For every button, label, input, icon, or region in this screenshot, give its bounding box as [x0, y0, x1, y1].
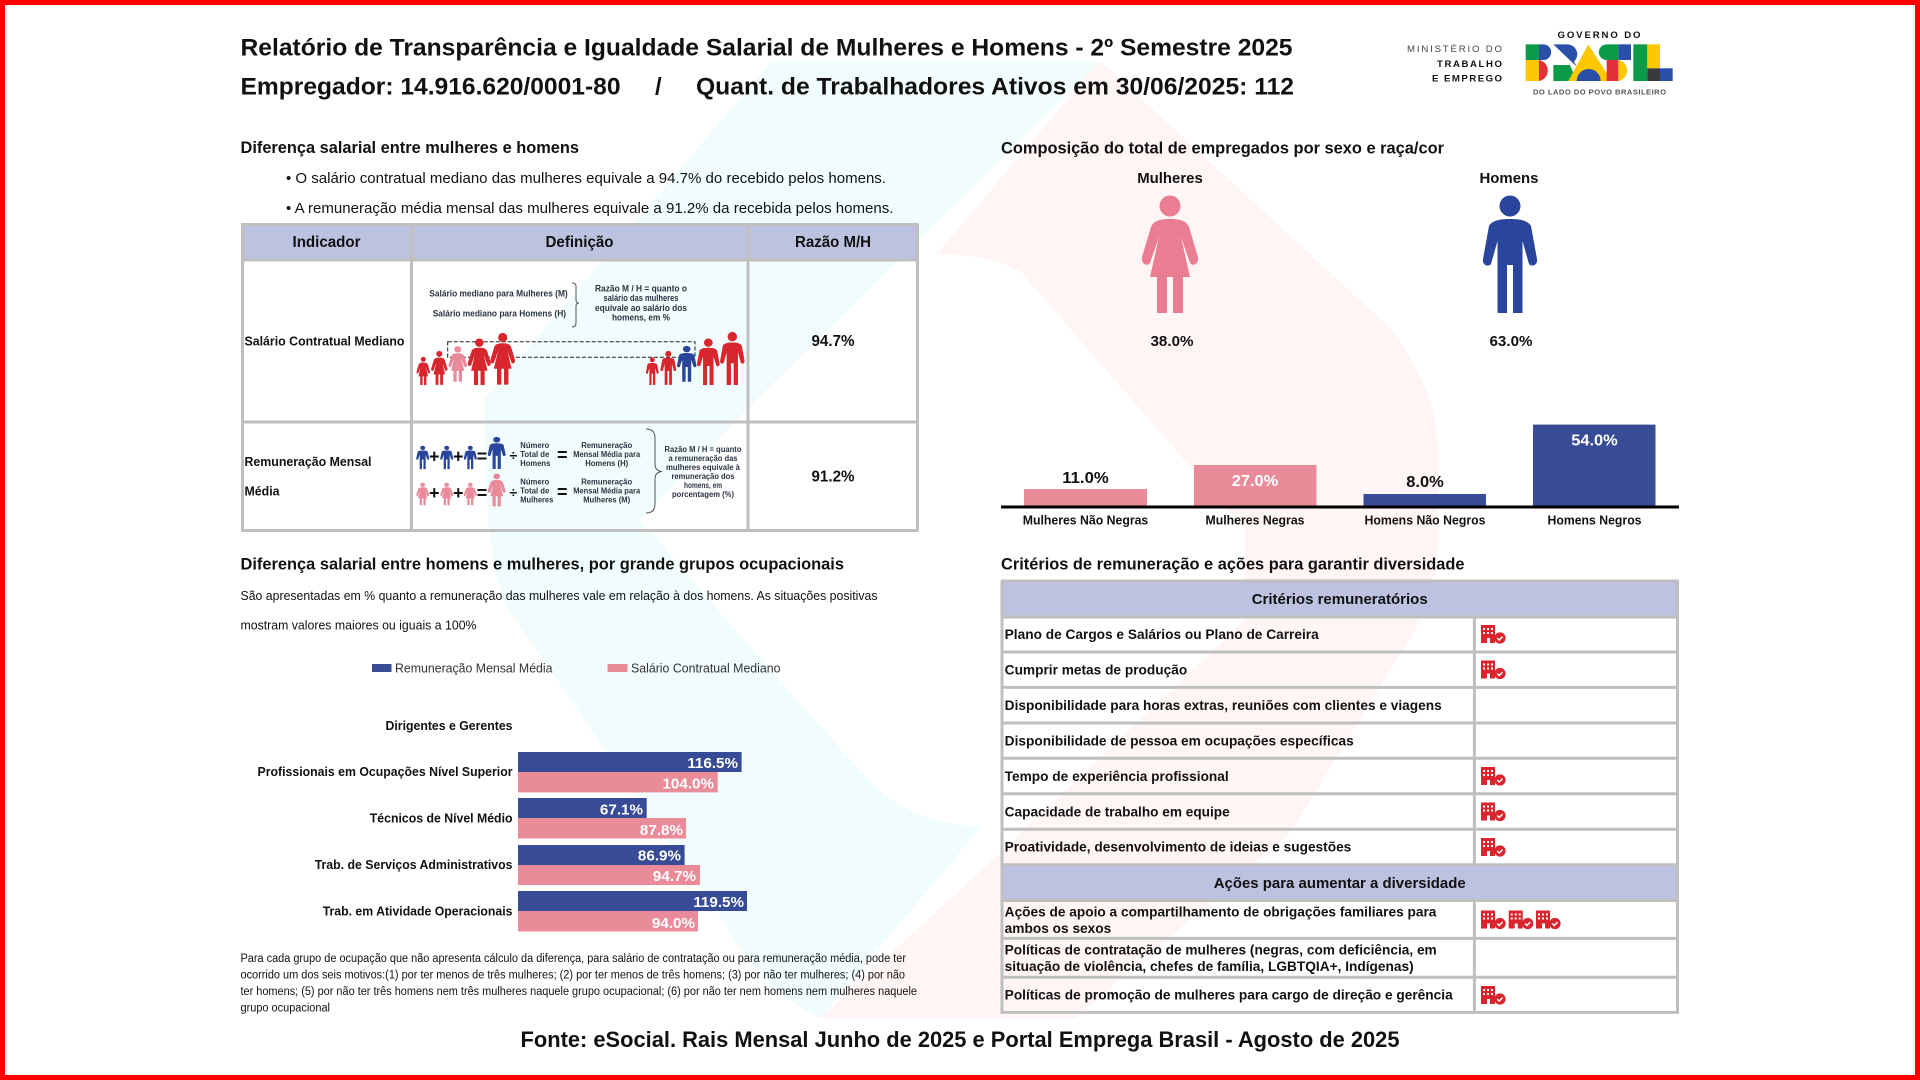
table: critérios e ações: Políticas de promoção de mulheres para cargo de direção e gerência [1005, 988, 1453, 1003]
table: indicadores: Razão M/H [795, 234, 871, 251]
table: critérios e ações: Proatividade, desenvolvimento de ideias e sugestões [1005, 840, 1351, 855]
bar chart: grupos: 119.5% [693, 894, 744, 911]
title: / [655, 74, 662, 100]
diagram: remuneração média [416, 429, 742, 513]
diagram: remuneração média: mulheres equivale à [666, 462, 740, 472]
pictogram: mulheres [1137, 171, 1203, 350]
panel: critérios [1001, 556, 1679, 1014]
diagram: salário mediano: Salário mediano para Mulheres (M) [429, 288, 568, 298]
diagram: remuneração média: Razão M / H = quanto [664, 444, 742, 454]
table: indicadores [241, 224, 918, 531]
pictogram: mulheres: Mulheres [1137, 171, 1203, 187]
diagram: salário mediano [417, 282, 745, 385]
table: critérios e ações: Tempo de experiência profissional [1005, 769, 1229, 784]
bar chart: sexo e raça: 11.0% [1062, 470, 1109, 487]
diagram: remuneração média: Remuneração [581, 440, 632, 450]
diagram: remuneração média: remuneração dos [672, 471, 735, 481]
bar chart: grupos: Dirigentes e Gerentes [386, 719, 512, 733]
diagram: remuneração média: Mulheres [520, 495, 553, 505]
diagram: remuneração média: a remuneração das [668, 453, 738, 463]
diagram: salário mediano: salário das mulheres [604, 292, 678, 303]
footnote: grupo ocupacional [240, 1003, 330, 1015]
bar chart: grupos: 104.0% [662, 776, 714, 793]
logo: Governo do Brasil: GOVERNO DO [1558, 30, 1641, 41]
logo: Ministério do Trabalho e Emprego: MINISTÉRIO DO [1407, 44, 1502, 55]
pictogram: homens [1480, 171, 1538, 350]
diagram: remuneração média: ÷ [509, 484, 517, 500]
title: Empregador: 14.916.620/0001-80 [240, 74, 620, 100]
logo: Governo do Brasil [1526, 30, 1673, 96]
pictogram: homens: 63.0% [1490, 334, 1532, 350]
legend: Remuneração Mensal Média [395, 660, 553, 676]
table: critérios e ações: Políticas de contratação de mulheres (negras, com deficiência, em [1005, 943, 1437, 958]
table: indicadores: 91.2% [812, 468, 855, 486]
diagram: remuneração média: Homens (H) [585, 458, 628, 468]
heading: diferença salarial: Diferença salarial entre mulheres e homens [240, 139, 579, 157]
bar chart: grupos: 87.8% [640, 822, 683, 839]
heading: grupos ocupacionais: Diferença salarial entre homens e mulheres, por grande grupos ocupacionais [240, 556, 844, 574]
table: critérios e ações: Cumprir metas de produção [1005, 662, 1187, 677]
diagram: remuneração média: + [429, 483, 440, 503]
bullet text: • O salário contratual mediano das mulheres equivale a 94.7% do recebido pelos homens. [286, 170, 886, 187]
bar chart: grupos: Profissionais em Ocupações Nível Superior [258, 765, 513, 779]
table: critérios e ações: Disponibilidade de pessoa em ocupações específicas [1005, 734, 1354, 749]
pictogram: homens: Homens [1480, 171, 1538, 187]
pictogram: mulheres: 38.0% [1150, 334, 1194, 350]
title [240, 34, 1294, 100]
logo: Ministério do Trabalho e Emprego [1407, 44, 1503, 84]
bar chart: grupos: Trab. em Atividade Operacionais [323, 904, 512, 918]
legend [372, 660, 780, 676]
bar chart: grupos: 94.0% [652, 915, 695, 932]
bar chart: grupos: 86.9% [638, 848, 681, 865]
diagram: remuneração média: Homens [520, 458, 550, 468]
table: critérios e ações: Ações de apoio a compartilhamento de obrigações familiares para [1005, 905, 1437, 920]
bar chart: grupos: 67.1% [600, 802, 643, 818]
table: indicadores: Salário Contratual Mediano [244, 334, 405, 348]
heading: critérios: Critérios de remuneração e ações para garantir diversidade [1001, 556, 1464, 574]
panel: grupos ocupacionais [240, 556, 917, 1015]
bar chart: sexo e raça: 27.0% [1232, 473, 1278, 490]
diagram: remuneração média: Total de [520, 486, 549, 496]
table: critérios e ações: Critérios remuneratórios [1252, 591, 1428, 608]
diagram: remuneração média: Mensal Média para [573, 486, 640, 496]
logo: Ministério do Trabalho e Emprego: TRABALHO [1437, 59, 1503, 70]
diagram: salário mediano: Salário mediano para Homens (H) [433, 308, 566, 318]
diagram: remuneração média: = [477, 483, 487, 503]
diagram: salário mediano: homens, em % [612, 312, 671, 322]
table: indicadores: Média [244, 484, 280, 498]
diagram: remuneração média: + [453, 446, 464, 466]
bullet text: • A remuneração média mensal das mulheres equivale a 91.2% da recebida pelos homens. [286, 200, 894, 217]
bar chart: sexo e raça: 8.0% [1406, 474, 1444, 491]
panel: composição [1001, 140, 1679, 528]
bar chart: grupos: Trab. de Serviços Administrativos [315, 858, 512, 872]
footnote [240, 953, 917, 1015]
bar chart: sexo e raça [1001, 425, 1679, 528]
title: Relatório de Transparência e Igualdade Salarial de Mulheres e Homens - 2º Semestre 2025 [240, 34, 1292, 62]
description text: São apresentadas em % quanto a remuneração das mulheres vale em relação à dos homens. As situações positivas [240, 589, 878, 603]
legend: Salário Contratual Mediano [631, 660, 780, 676]
table: critérios e ações: ambos os sexos [1005, 921, 1111, 936]
panel: diferença salarial [240, 139, 918, 531]
footnote: ter homens; (5) por não ter três homens nem três mulheres naquele grupo ocupacional; (6) por não ter nem homens nem mulheres naquele [240, 986, 917, 998]
bullet text [286, 170, 894, 217]
logo: Governo do Brasil: DO LADO DO POVO BRASILEIRO [1533, 88, 1666, 96]
diagram: salário mediano: equivale ao salário dos [595, 302, 687, 313]
bar chart: sexo e raça: Homens Negros [1548, 514, 1642, 528]
diagram: salário mediano: Razão M / H = quanto o [595, 282, 687, 294]
table: critérios e ações: Ações para aumentar a diversidade [1214, 875, 1466, 892]
description text [240, 589, 878, 632]
diagram: remuneração média: Remuneração [581, 477, 632, 487]
table: critérios e ações: Disponibilidade para horas extras, reuniões com clientes e viagens [1005, 698, 1442, 713]
table: critérios e ações [1001, 581, 1679, 1014]
table: critérios e ações: Plano de Cargos e Salários ou Plano de Carreira [1005, 627, 1319, 642]
diagram: remuneração média: Número [520, 440, 549, 450]
logo: Ministério do Trabalho e Emprego: E EMPREGO [1432, 74, 1503, 84]
diagram: remuneração média: = [477, 446, 487, 466]
bar chart: sexo e raça: Mulheres Não Negras [1023, 514, 1148, 528]
table: indicadores: Definição [546, 234, 614, 251]
source footer: Fonte: eSocial. Rais Mensal Junho de 2025 e Portal Emprega Brasil - Agosto de 2025 [520, 1027, 1400, 1052]
bar chart: sexo e raça: 54.0% [1571, 432, 1618, 450]
diagram: remuneração média: Total de [520, 449, 549, 459]
bar chart: grupos: 116.5% [687, 755, 738, 772]
diagram: remuneração média: porcentagem (%) [672, 489, 734, 499]
table: indicadores: Indicador [292, 234, 360, 251]
footnote: Para cada grupo de ocupação que não apresenta cálculo da diferença, para salário de contratação ou para remuneração média, pode ter [240, 953, 906, 965]
bar chart: grupos: 94.7% [653, 868, 696, 885]
icons: empresa com critério [1481, 625, 1561, 1005]
heading: composição: Composição do total de empregados por sexo e raça/cor [1001, 140, 1445, 158]
description text: mostram valores maiores ou iguais a 100% [240, 618, 476, 632]
diagram: remuneração média: + [453, 483, 464, 503]
diagram: remuneração média: homens, em [684, 480, 722, 490]
diagram: remuneração média: = [557, 445, 568, 465]
diagram: remuneração média: + [429, 446, 440, 466]
title: Quant. de Trabalhadores Ativos em 30/06/2025: 112 [696, 74, 1294, 100]
diagram: remuneração média: Mensal Média para [573, 449, 640, 459]
diagram: remuneração média: Número [520, 477, 549, 487]
diagram: remuneração média: Mulheres (M) [583, 495, 630, 505]
table: critérios e ações: situação de violência, chefes de família, LGBTQIA+, Indígenas) [1005, 959, 1414, 974]
diagram: remuneração média: ÷ [509, 447, 517, 463]
bar chart: sexo e raça: Mulheres Negras [1206, 514, 1304, 528]
table: critérios e ações: Capacidade de trabalho em equipe [1005, 805, 1230, 820]
table: indicadores: 94.7% [812, 333, 855, 350]
diagram: remuneração média: = [557, 482, 568, 502]
bar chart: grupos [258, 719, 747, 932]
table: indicadores: Remuneração Mensal [244, 454, 372, 469]
footnote: ocorrido um dos seis motivos:(1) por ter menos de três mulheres; (2) por ter menos de três homens; (3) por não ter mulheres; (4) por não [240, 970, 905, 982]
bar chart: grupos: Técnicos de Nível Médio [370, 812, 513, 826]
bar chart: sexo e raça: Homens Não Negros [1364, 514, 1486, 528]
